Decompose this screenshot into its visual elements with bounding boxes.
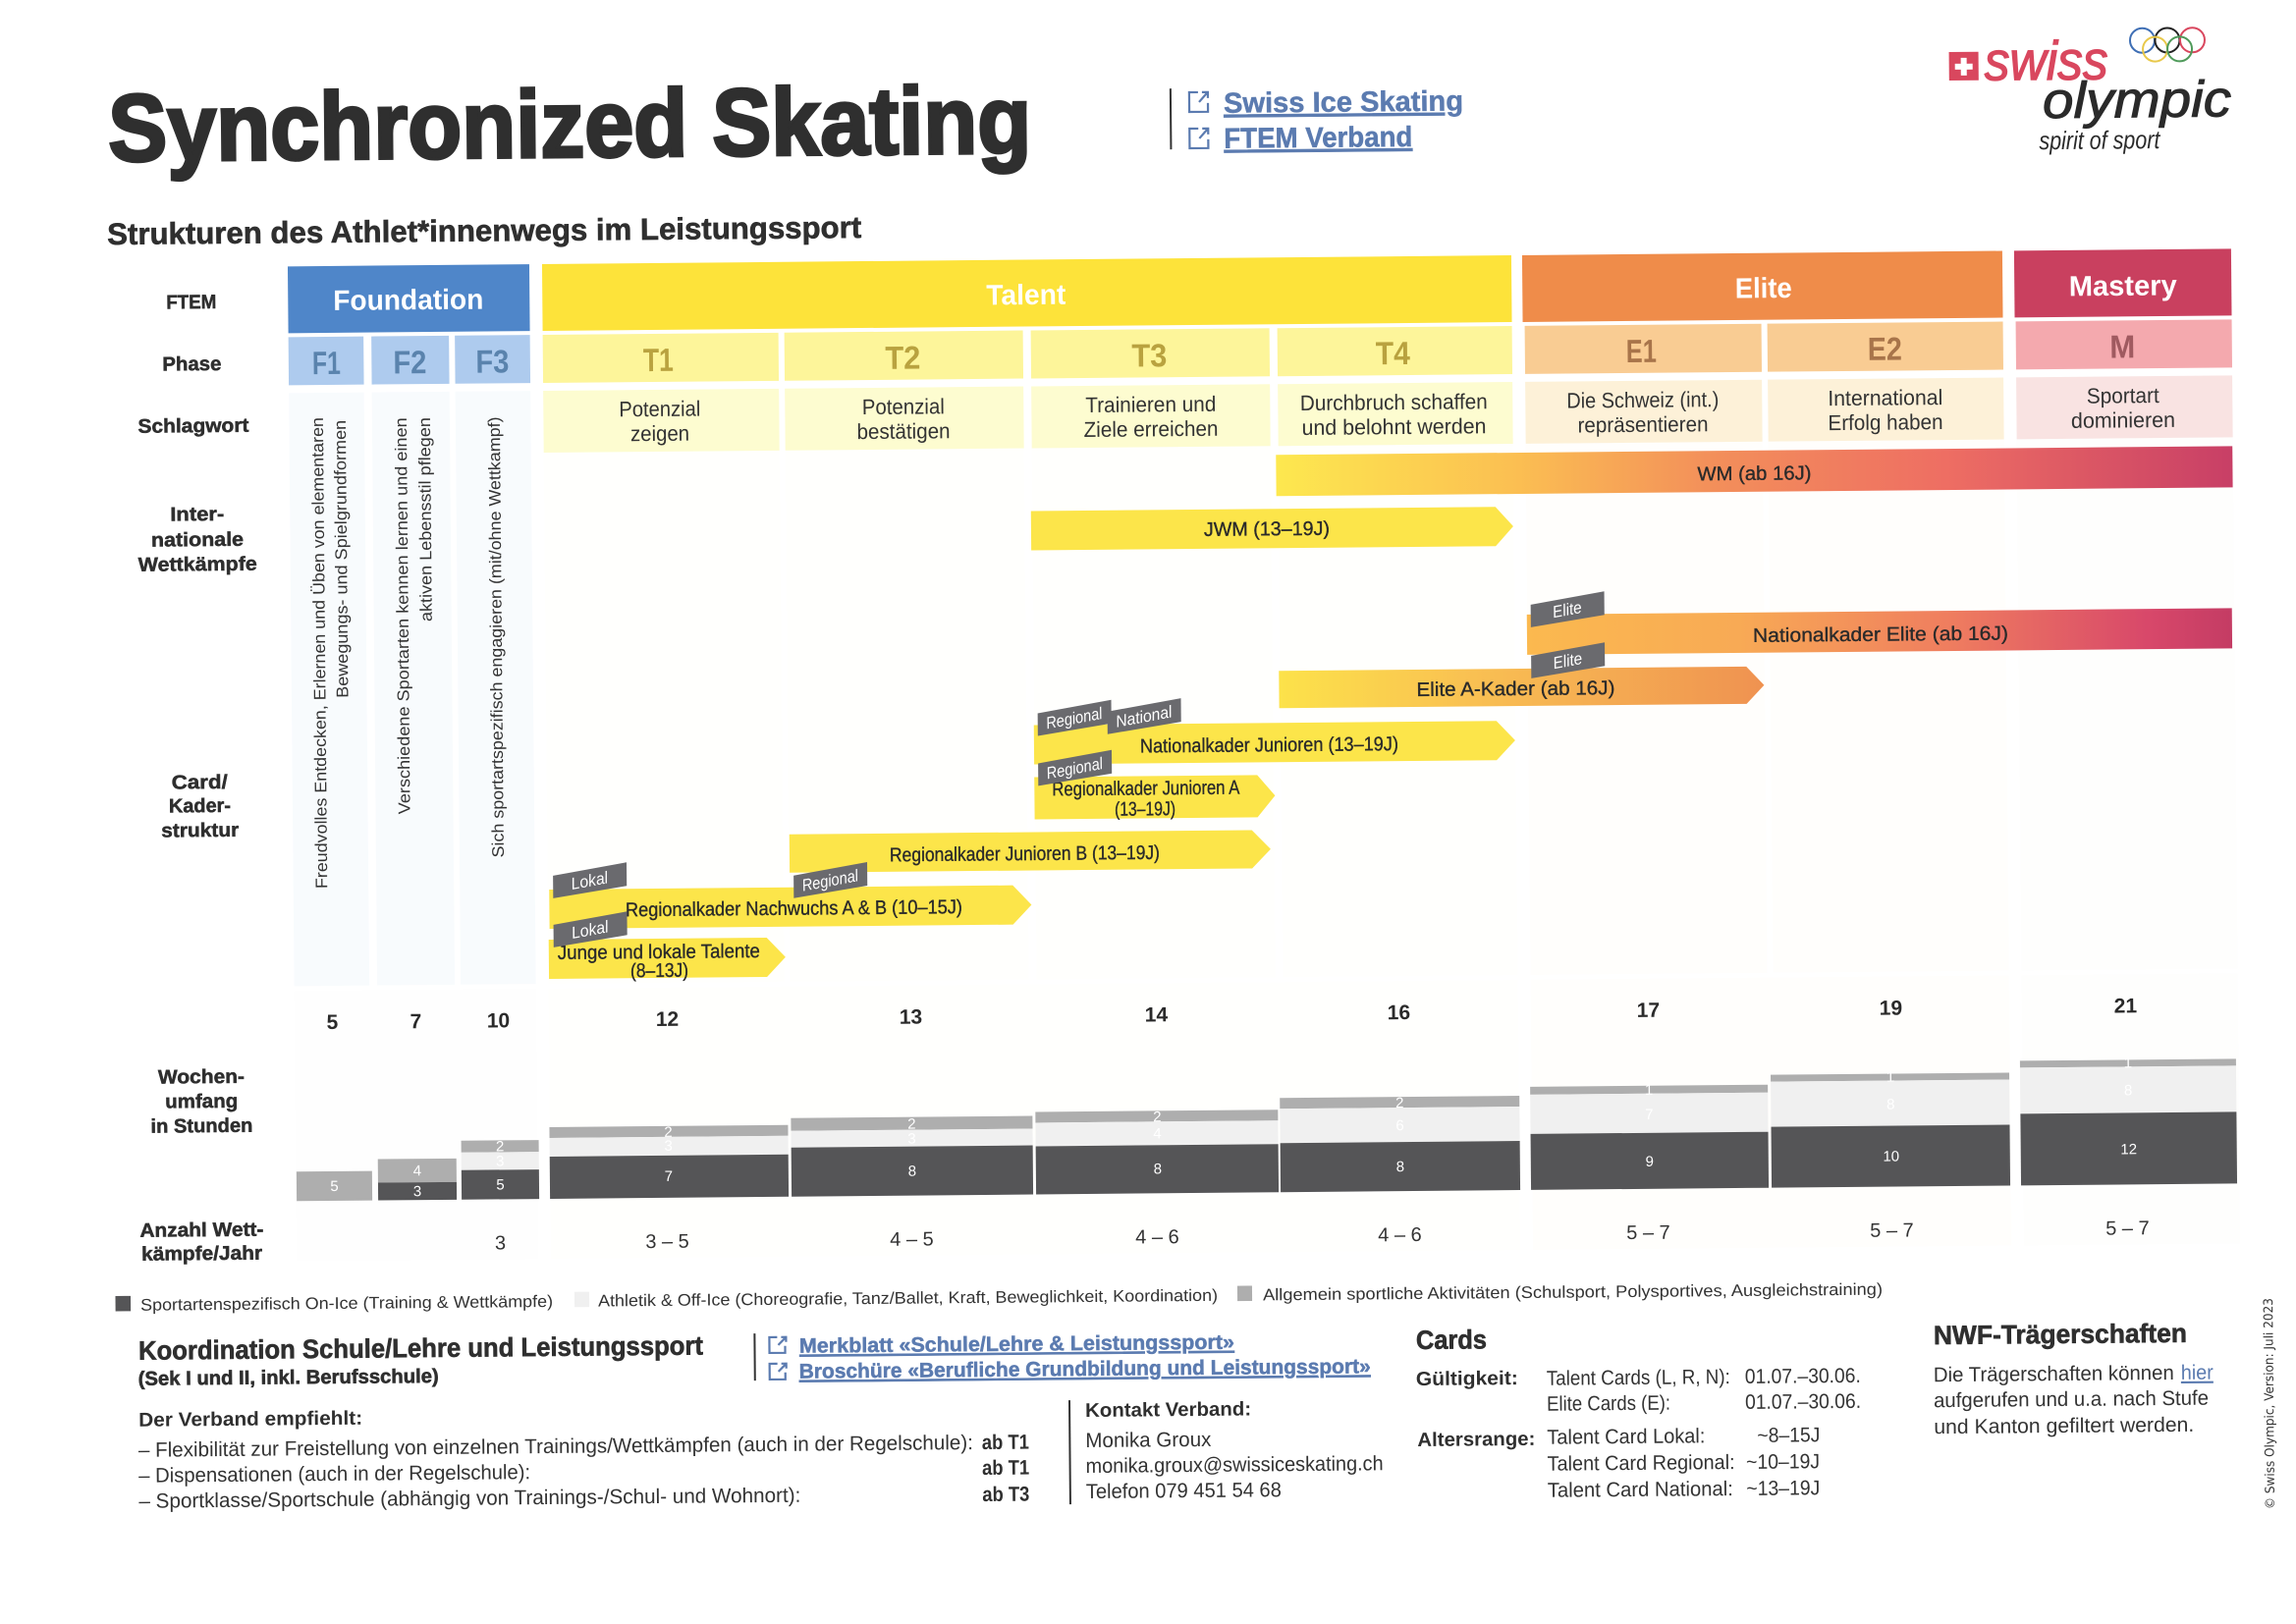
section: Koordination Schule/Lehre: – Flexibilität zur Freistellung von einzelnen Trainings/Wettkämpfen (auch in der Regelschule): [138,1432,973,1462]
stack F2: 3 [413,1183,421,1200]
arrow: Regionalkader Nachwuchs: Regionalkader Nachwuchs A & B (10–15J) [626,896,962,921]
logo: Swiss Olympic: spirit of sport [2039,125,2161,155]
section: Koordination Schule/Lehre [137,1328,1030,1514]
stack F3: 2 [496,1138,504,1155]
Schlagwort row: Durchbruch schaffen [1300,389,1488,415]
stack E1: 9 [1646,1154,1654,1170]
competitions per year: 5 – 7 [2105,1218,2150,1240]
stack E2: 1 [1886,1069,1894,1086]
phase row: T4 [1376,335,1411,371]
tag: Regional (Junioren): Regional [1044,704,1105,732]
stack F2: 4 [413,1163,421,1179]
legend: Allgemein: Allgemein sportliche Aktivitäten (Schulsport, Polysportives, Ausgleichstraining) [1263,1280,1883,1304]
Schlagwort row: Erfolg haben [1828,409,1943,435]
section: Cards: Gültigkeit: [1416,1368,1518,1390]
weekly hours totals: 13 [900,1006,922,1029]
document links [753,1327,1371,1383]
Schlagwort row: repräsentieren [1577,411,1709,437]
stack T1: 7 [665,1168,673,1185]
section: Cards: 01.07.–30.06. [1745,1365,1861,1388]
section: Cards: Altersrange: [1417,1429,1535,1451]
stack T4 [1280,1094,1520,1192]
phase row: M [2109,328,2135,365]
section: Koordination Schule/Lehre: ab T1 [982,1432,1029,1454]
tag: Elite lower [1531,642,1605,678]
phase row: T2 [885,340,921,376]
section: Cards [1415,1322,1862,1503]
stack T3: 2 [1153,1109,1162,1125]
background column stripes [289,375,2240,1261]
stack F3: 3 [496,1153,505,1169]
weekly hours totals: 5 [327,1011,339,1034]
bar: Nationalkader Elite [1527,608,2232,655]
section: NWF-Trägerschaften: Die Trägerschaften können [1934,1362,2174,1386]
section: Cards: Cards [1416,1325,1487,1355]
stack T1: 3 [664,1138,673,1155]
stack T3 [1035,1108,1279,1194]
band: Mastery [2014,248,2232,317]
Schlagwort row: zeigen [630,421,689,446]
section: Cards: 01.07.–30.06. [1745,1390,1861,1414]
bar: Nationalkader Elite: Nationalkader Elite (ab 16J) [1753,623,2008,647]
tag: Lokal lower: Lokal [570,917,611,943]
Schlagwort row: Die Schweiz (int.) [1566,387,1719,413]
section: Koordination Schule/Lehre: ab T1 [982,1457,1029,1480]
stack T2: 2 [907,1116,916,1133]
phase row: F3 [475,343,510,380]
arrow: Junge und lokale Talente: Junge und lokale Talente [558,941,760,964]
row labels: Inter- [170,504,224,525]
vertical Foundation descriptions: Sich sportartspezifisch engagieren (mit/ohne Wettkampf) [485,416,508,858]
icon: external link Swiss Ice Skating [1189,92,1208,112]
Schlagwort row: und belohnt werden [1301,413,1487,440]
tag: Elite upper [1531,591,1605,627]
vertical Foundation descriptions: aktiven Lebensstil pflegen [415,417,436,622]
Schlagwort row: Potenzial [862,394,945,419]
stack T4: 2 [1395,1095,1404,1111]
arrow: Elite A-Kader [1279,667,1765,708]
section: Cards: Talent Card Regional: [1547,1451,1735,1476]
section: Cards: Talent Card Lokal: [1547,1425,1705,1449]
band: Talent [542,255,1512,331]
section: Cards: ~8–15J [1757,1424,1820,1447]
vertical Foundation descriptions: Freudvolles Entdecken, Erlernen und Üben von elementaren [308,417,331,889]
competitions per year: 4 – 6 [1378,1224,1422,1246]
stacked bar chart: weekly hours [296,1054,2237,1201]
arrow: Nationalkader Junioren [1034,721,1515,764]
logo: Swiss Olympic: swiss [1984,29,2108,92]
row labels: struktur [161,820,240,842]
stack F2 [378,1159,457,1201]
row labels: Schlagwort [137,415,249,438]
Schlagwort row: Trainieren und [1085,392,1216,417]
weekly hours totals: 21 [2114,995,2137,1018]
row labels: FTEM [166,292,216,313]
icon: external link Broschüre [770,1364,787,1380]
section: Koordination Schule/Lehre: (Sek I und II, inkl. Berufsschule) [138,1366,439,1390]
stack M [2020,1054,2237,1185]
stack T2: 3 [907,1131,916,1148]
stack E2: 10 [1883,1148,1899,1165]
arrow: Junge und lokale Talente [549,938,786,983]
section: Cards: Talent Card National: [1548,1478,1733,1502]
phase row: E1 [1626,333,1657,369]
row labels: kämpfe/Jahr [141,1243,262,1266]
contact block [1068,1397,1384,1504]
bar: WM [1276,446,2233,496]
icon: external link FTEM Verband [1189,129,1208,148]
row labels: Wettkämpfe [138,554,257,576]
section: Koordination Schule/Lehre: Koordination Schule/Lehre und Leistungssport [138,1331,703,1366]
phase row: E2 [1868,330,1902,367]
vertical Foundation descriptions: Verschiedene Sportarten kennen lernen und einen [392,417,414,814]
row labels: Phase [162,353,221,376]
stack F1 [297,1171,372,1201]
weekly hours totals: 12 [656,1008,679,1031]
stack T3: 8 [1154,1161,1162,1177]
link: FTEM Verband: FTEM Verband [1224,122,1412,155]
link: Swiss Ice Skating: Swiss Ice Skating [1224,85,1463,120]
logo: Swiss Olympic: olympic [2043,71,2231,130]
weekly hours totals: 10 [487,1009,510,1033]
contact block: monika.groux@swissiceskating.ch [1085,1452,1384,1478]
arrow: Regionalkader Junioren B: Regionalkader Junioren B (13–19J) [890,842,1160,866]
phase row: F2 [393,344,427,380]
section: NWF-Trägerschaften [1933,1319,2214,1438]
bar: WM: WM (ab 16J) [1697,462,1812,485]
band: Foundation: Foundation [333,285,483,317]
weekly hours totals: 17 [1637,1000,1660,1022]
row labels: in Stunden [150,1115,253,1138]
stack E1: 7 [1645,1107,1654,1123]
title: Synchronized Skating [108,66,1032,182]
arrow: JWM [1031,507,1513,550]
weekly hours totals: 7 [410,1010,421,1033]
stack T2 [791,1115,1033,1197]
arrow: Regionalkader Junioren A: Regionalkader Junioren A [1052,778,1240,800]
competitions per year: 4 – 6 [1135,1226,1179,1249]
competitions per year: 3 [495,1232,506,1254]
competitions per year [495,1218,2150,1254]
band: Elite [1522,251,2003,322]
phase row [289,319,2232,385]
Schlagwort row: dominieren [2071,407,2175,433]
tag: Lokal upper: Lokal [570,868,611,893]
row labels: nationale [151,529,244,552]
FTEM header bands [288,248,2232,333]
tag: Elite upper: Elite [1551,598,1583,622]
section: NWF-Trägerschaften: NWF-Trägerschaften [1934,1319,2187,1350]
weekly hours totals: 16 [1388,1001,1410,1024]
phase row: F1 [312,345,341,381]
link: Merkblatt: Merkblatt «Schule/Lehre & Leistungssport» [799,1331,1234,1358]
band: Elite: Elite [1735,273,1792,304]
contact block: Telefon 079 451 54 68 [1086,1479,1282,1503]
tag: Regional (Junioren A): Regional [1045,754,1105,783]
band: Mastery: Mastery [2069,270,2177,302]
stack T4: 6 [1395,1117,1404,1134]
stack E2 [1771,1067,2010,1188]
legend [115,1280,1883,1315]
phase row: T3 [1131,337,1167,374]
competitions per year: 4 – 5 [890,1228,934,1251]
section: NWF-Trägerschaften: hier [2181,1362,2214,1384]
Schlagwort row: Ziele erreichen [1083,416,1219,442]
arrow: Regionalkader Junioren B [790,830,1271,873]
vertical Foundation descriptions [308,415,508,889]
section: Koordination Schule/Lehre: – Sportklasse/Sportschule (abhängig von Trainings-/Schul- und Wohnort): [138,1485,800,1513]
tag: Lokal lower [553,911,628,947]
arrow: Regionalkader Nachwuchs [549,886,1032,929]
phase row: T1 [643,342,674,378]
competitions per year: 3 – 5 [645,1231,689,1253]
external links [1170,85,1463,155]
icon: external link Merkblatt [769,1337,787,1353]
Schlagwort row: Potenzial [619,397,700,421]
arrow: Regionalkader Junioren A: (13–19J) [1115,798,1175,821]
band: Talent: Talent [986,280,1066,311]
Schlagwort row: International [1828,385,1942,410]
stack T3: 4 [1153,1125,1162,1142]
logo: Swiss Olympic [1948,27,2232,156]
copyright: © Swiss Olympic, Version: Juli 2023 [2262,1298,2278,1509]
section: NWF-Trägerschaften: aufgerufen und u.a. nach Stufe [1934,1387,2209,1412]
stack T1: 2 [664,1124,673,1141]
weekly hours totals: 14 [1145,1003,1169,1026]
band: Foundation [288,264,530,333]
stack E1: 1 [1645,1082,1653,1099]
arrow: JWM: JWM (13–19J) [1204,518,1330,541]
competitions per year: 5 – 7 [1870,1219,1914,1242]
legend: Off-Ice: Athletik & Off-Ice (Choreografie, Tanz/Ballet, Kraft, Beweglichkeit, Koordination) [598,1286,1218,1311]
tag: Lokal upper [553,862,627,898]
arrow: Regionalkader Junioren A [1034,775,1276,821]
arrow: Nationalkader Junioren: Nationalkader Junioren (13–19J) [1140,733,1398,757]
tag: Elite lower: Elite [1552,649,1584,673]
section: NWF-Trägerschaften: und Kanton gefiltert werden. [1934,1414,2194,1438]
arrow: Junge und lokale Talente: (8–13J) [630,960,688,982]
section: Cards: ~10–19J [1746,1450,1820,1474]
vertical Foundation descriptions: Bewegungs- und Spielgrundformen [331,420,352,698]
stack F1: 5 [330,1178,339,1195]
contact block: Kontakt Verband: [1085,1398,1251,1422]
section: Koordination Schule/Lehre: – Dispensationen (auch in der Regelschule): [138,1461,530,1488]
section: Cards: Talent Cards (L, R, N): [1547,1366,1730,1390]
weekly hours totals: 19 [1880,997,1902,1020]
row labels: Wochen- [158,1066,245,1089]
Schlagwort row: bestätigen [856,418,951,444]
tag: Regional (Nachwuchs): Regional [800,866,861,895]
link: Broschüre: Broschüre «Berufliche Grundbildung und Leistungssport» [799,1355,1371,1383]
contact block: Monika Groux [1085,1429,1212,1452]
subtitle: Strukturen des Athlet*innenwegs im Leistungssport [107,210,861,251]
section: Koordination Schule/Lehre: ab T3 [982,1484,1029,1506]
stack T1 [549,1123,789,1199]
stack T2: 8 [908,1164,916,1180]
stack F3 [462,1138,539,1200]
row labels: Anzahl Wett- [139,1219,263,1242]
stack M: 12 [2120,1141,2137,1158]
stack M: 1 [2124,1055,2132,1071]
section: Cards: ~13–19J [1746,1477,1820,1500]
tag: National: National [1114,702,1175,731]
row labels: Kader- [169,795,231,817]
row labels [132,292,264,1266]
section: Cards: Elite Cards (E): [1547,1392,1670,1416]
legend: On-Ice: Sportartenspezifisch On-Ice (Training & Wettkämpfe) [140,1292,553,1315]
stack M: 8 [2124,1082,2132,1099]
Schlagwort row [543,375,2233,453]
competitions per year: 5 – 7 [1626,1222,1670,1244]
weekly hours totals [327,995,2137,1034]
arrow: Elite A-Kader: Elite A-Kader (ab 16J) [1416,677,1615,701]
stack E2: 8 [1886,1097,1895,1113]
stack F3: 5 [496,1176,505,1193]
stack E1 [1530,1081,1769,1190]
section: Koordination Schule/Lehre: Der Verband empfiehlt: [138,1408,362,1432]
stack T4: 8 [1396,1159,1404,1175]
row labels: umfang [165,1091,238,1113]
row labels: Card/ [172,772,228,793]
Schlagwort row: Sportart [2087,383,2159,408]
